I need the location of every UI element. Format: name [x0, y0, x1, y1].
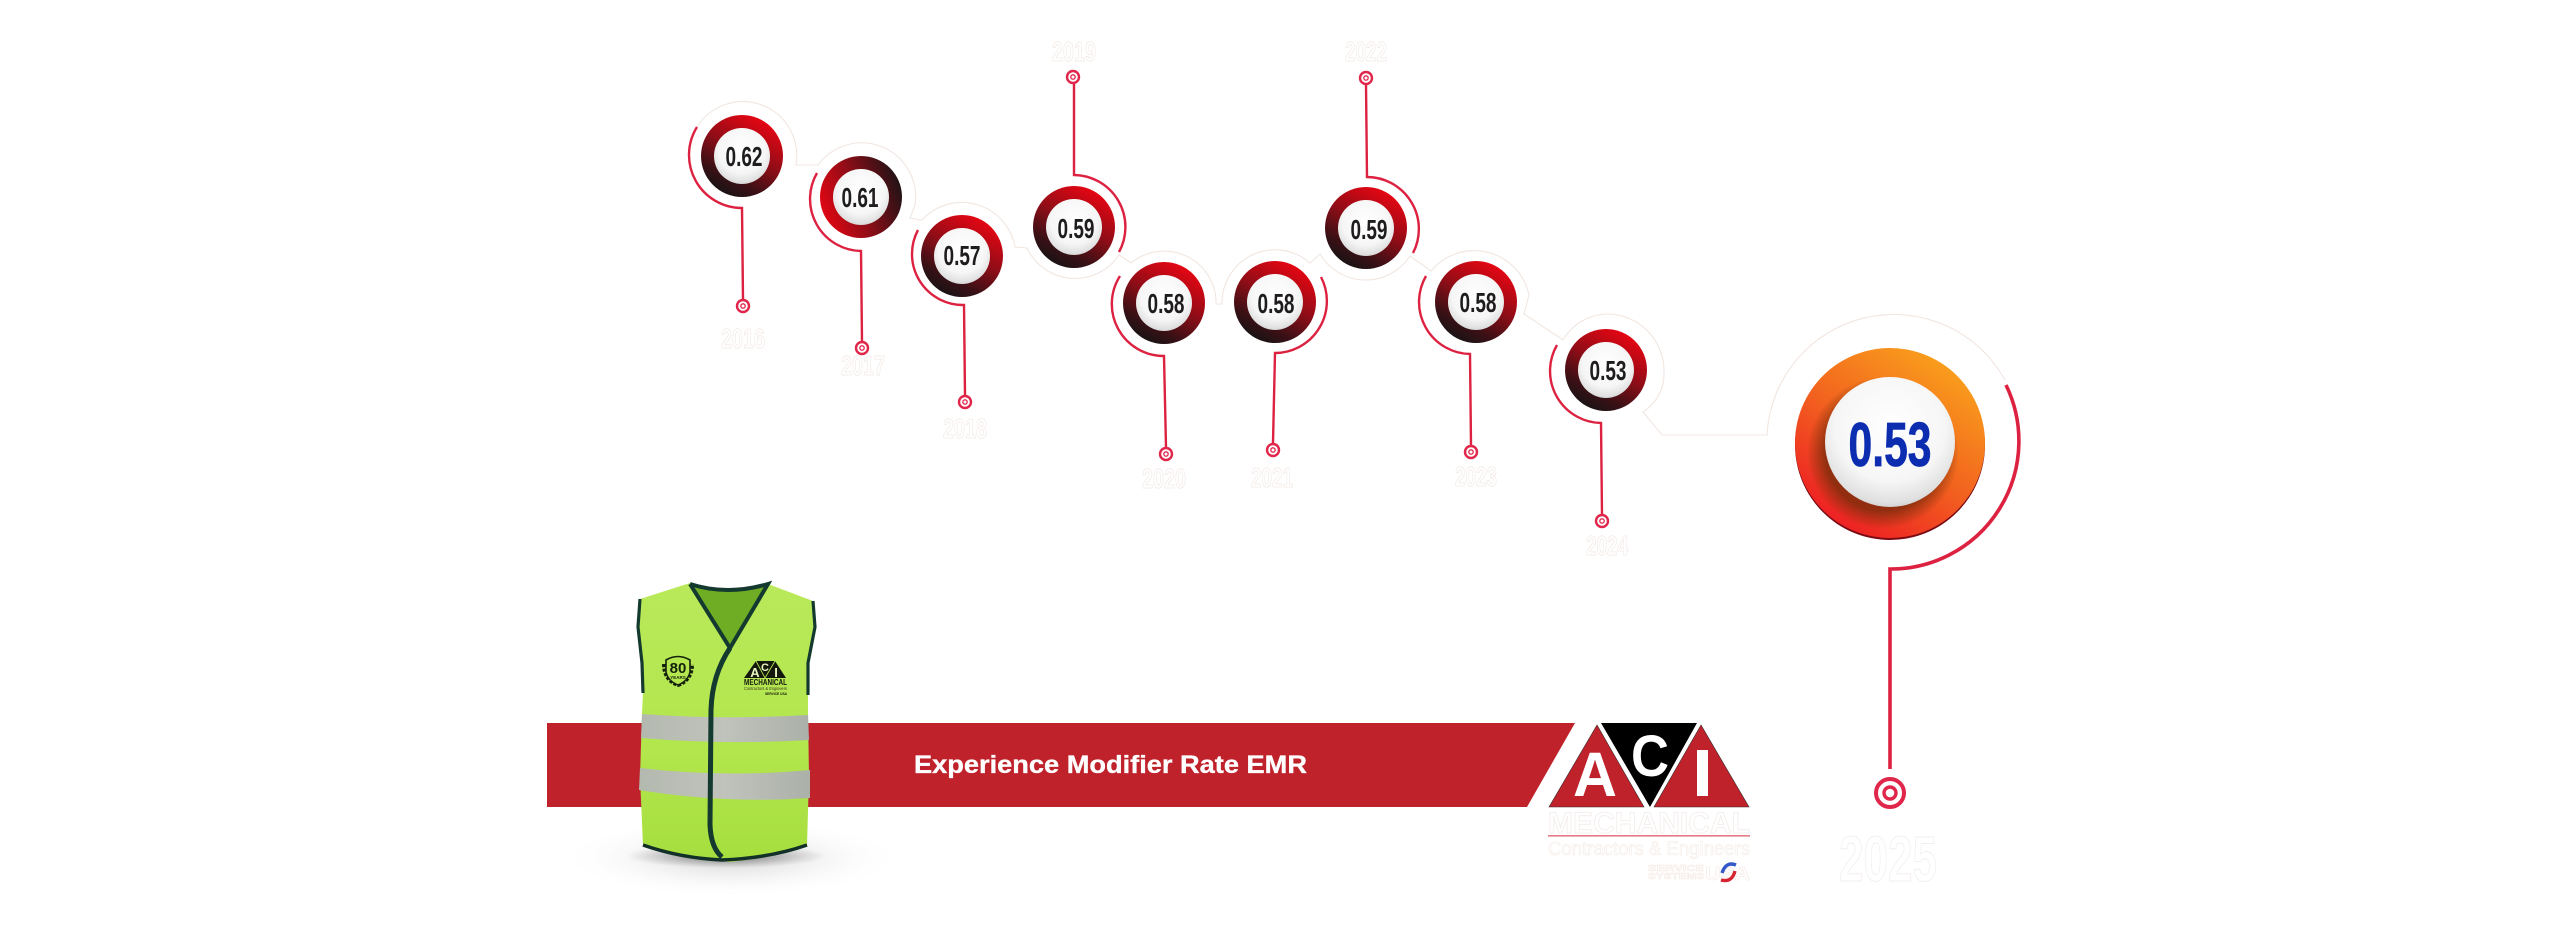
milestone: 2019: 2019	[1052, 36, 1096, 67]
milestone: 2024: 2024	[1586, 530, 1628, 561]
milestone: 2024: 0.53	[1590, 355, 1626, 386]
vest badge: 80 years: 80	[670, 660, 686, 677]
logo sub-brand: SERVICE	[1648, 864, 1705, 873]
logo triangle: C	[1601, 723, 1697, 807]
milestone: 2021: 2021	[1251, 462, 1293, 493]
milestone: 2019	[1033, 36, 1125, 268]
milestone: 2022	[1325, 36, 1419, 269]
milestone: 2016: 2016	[721, 323, 765, 354]
vest logo: ACI Mechanical: C	[761, 662, 769, 674]
vest logo: ACI Mechanical: MECHANICAL	[744, 678, 787, 687]
vest logo: ACI Mechanical: SERVICE USA	[765, 691, 787, 696]
milestone: 2021	[1234, 261, 1327, 493]
vest logo: ACI Mechanical: Contractors & Engineers	[744, 686, 788, 691]
illustration: safety vest	[559, 583, 903, 898]
logo: ACI Mechanical	[1548, 723, 1750, 884]
milestone: 2016: 0.62	[726, 141, 762, 172]
logo sub-brand: SYSTEMS	[1648, 872, 1705, 881]
milestone: 2022: 0.59	[1350, 214, 1388, 245]
connector: faint timeline path	[697, 102, 2005, 435]
vest badge: 80 years: YEARS	[670, 675, 686, 680]
milestone: 2025 highlight: 0.53	[1848, 411, 1932, 480]
milestone: 2018: 2018	[943, 413, 987, 444]
logo triangle: A: A	[1573, 740, 1617, 810]
milestone: 2020: 0.58	[1148, 288, 1184, 319]
milestone: 2022: 2022	[1345, 36, 1387, 67]
vest logo: ACI Mechanical: A	[750, 665, 760, 680]
logo sub-brand: USA	[1705, 864, 1750, 884]
milestone: 2023: 2023	[1455, 461, 1497, 492]
milestone: 2019: 0.59	[1058, 213, 1094, 244]
milestone: 2018	[912, 215, 1003, 444]
milestone: 2016	[689, 115, 783, 354]
logo triangle: A	[1549, 725, 1644, 810]
banner: Experience Modifier Rate EMR	[547, 723, 1575, 807]
milestone: 2024	[1550, 329, 1647, 561]
milestone: 2018: 0.57	[944, 240, 980, 271]
milestone: 2025 highlight	[1795, 348, 2019, 895]
milestone: 2020: 2020	[1142, 463, 1186, 494]
milestone: 2023	[1419, 261, 1517, 492]
vest badge: 80 years	[664, 656, 692, 685]
logo triangle: I	[1654, 725, 1749, 807]
milestone: 2023: 0.58	[1460, 287, 1496, 318]
logo sub-brand	[1648, 864, 1750, 884]
banner: Experience Modifier Rate EMR: Experience Modifier Rate EMR	[914, 751, 1307, 779]
milestone: 2017: 2017	[841, 350, 885, 381]
milestone: 2017	[810, 156, 902, 381]
logo triangle: C: C	[1631, 724, 1669, 789]
milestone: 2017: 0.61	[842, 182, 878, 213]
vest logo: ACI Mechanical	[744, 661, 788, 696]
milestone: 2025 highlight: 2025	[1839, 823, 1937, 895]
logo tagline: Contractors & Engineers	[1548, 839, 1750, 860]
milestone: 2021: 0.58	[1258, 288, 1294, 319]
vest logo: ACI Mechanical: I	[774, 665, 778, 680]
milestone: 2020	[1112, 262, 1205, 494]
logo wordmark: MECHANICAL	[1548, 807, 1750, 840]
